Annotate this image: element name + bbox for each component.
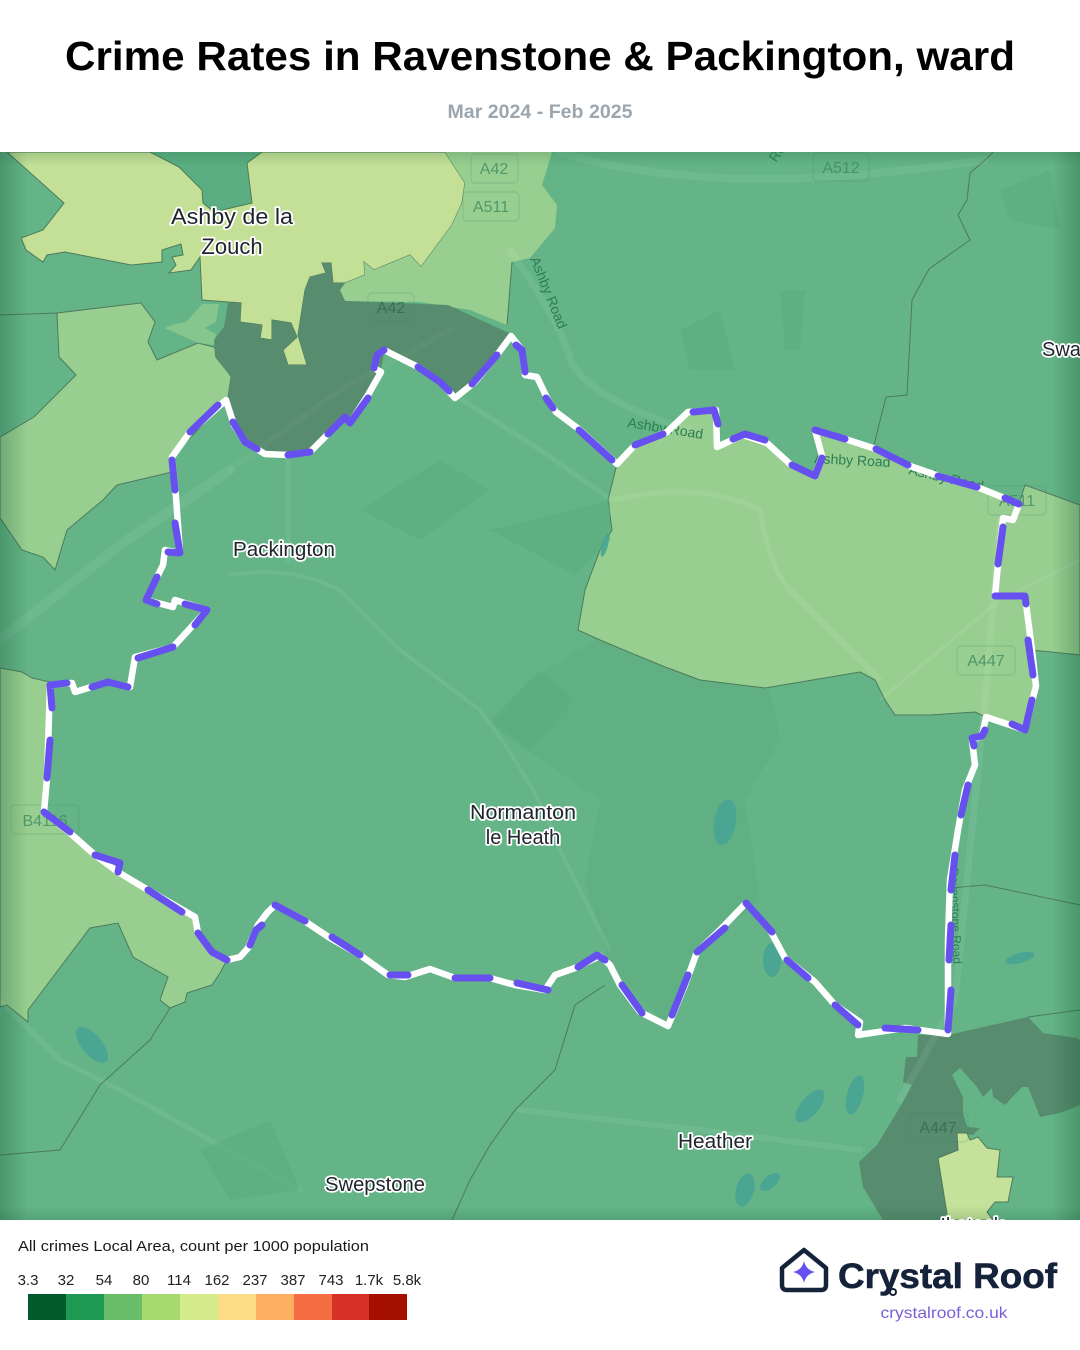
- legend tick labels: 80: [133, 1272, 149, 1289]
- legend tick labels: 3.3: [18, 1272, 38, 1289]
- road shield: A447 south: [920, 1112, 968, 1142]
- region: small light strip: [165, 304, 219, 345]
- legend tick labels: 237: [242, 1272, 268, 1289]
- road label: partial Re: Re: [765, 141, 789, 165]
- road shield: B4116: B4116: [22, 813, 68, 830]
- road shield: A42 Ashby: A42: [377, 300, 405, 317]
- road shield: A447 east: [957, 646, 1015, 675]
- place label: Normanton le Heath: Normanton: [470, 802, 576, 824]
- icon: house with star: [782, 1250, 826, 1290]
- legend tick labels: 114: [167, 1272, 191, 1289]
- road shield: A447 south: A447: [919, 1120, 957, 1137]
- legend tick labels: 54: [96, 1272, 112, 1289]
- road shield: A511 east: [988, 486, 1046, 515]
- region: east light green: [578, 410, 1080, 730]
- boundary white line: [44, 336, 1036, 1035]
- road label: Ashby Road centre: Ashby Road: [627, 414, 704, 442]
- region: west light green: [0, 303, 231, 570]
- place label: Packington: Packington: [233, 539, 335, 561]
- boundary purple dashes: [44, 345, 1033, 1030]
- legend tick labels: 1.7k: [355, 1272, 384, 1289]
- region boundary lines: [0, 152, 1080, 1220]
- place label: Heather: Heather: [678, 1131, 752, 1153]
- legend colour scale: [28, 1294, 407, 1320]
- map vignette: [0, 152, 1080, 1220]
- road shield: A42 Ashby: [368, 292, 414, 313]
- road shield: A42 north: A42: [480, 161, 508, 178]
- legend tick labels: [18, 1272, 422, 1289]
- water bodies: [70, 533, 1036, 1209]
- field patches: [214, 500, 610, 1190]
- place label: Normanton le Heath: le Heath: [486, 827, 560, 849]
- region: southwest light green: [0, 668, 227, 1022]
- road shield: A447 east: A447: [967, 653, 1005, 670]
- legend tick labels: 5.8k: [393, 1272, 422, 1289]
- place label: Ashby de la Zouch: Zouch: [201, 234, 263, 259]
- road label: Ashby Road east: Ashby Road: [814, 450, 891, 470]
- legend tick labels: 387: [280, 1272, 306, 1289]
- region: Ibstock high band: [938, 1133, 1013, 1220]
- date subtitle: Mar 2024 - Feb 2025: [448, 102, 633, 123]
- road shield: A512: [812, 160, 870, 182]
- road label: Ashby Road north-south: Ashby Road: [527, 254, 571, 331]
- region: Ibstock dark band: [859, 1017, 1080, 1220]
- logo: Crystal Roof: [782, 1250, 1057, 1322]
- legend tick labels: 32: [58, 1272, 74, 1289]
- region: low crime dark patch south of Ashby: [214, 263, 509, 455]
- legend: [18, 1238, 422, 1320]
- logo wordmark: Crystal Roof: [838, 1257, 1057, 1296]
- road shield: B4116: [11, 805, 79, 834]
- road shield: A511 north: [463, 192, 519, 221]
- road shield: A42 north: [471, 154, 518, 183]
- road shield: A511 north: A511: [473, 199, 509, 216]
- place label: Swepstone: Swepstone: [325, 1174, 425, 1196]
- logo keyring detail: [890, 1289, 896, 1295]
- road label: Ashby Road far east: Ashby Road: [907, 461, 985, 494]
- map base: low crime green: [0, 152, 1080, 1220]
- place label: Ibstock partial: Ibstock: [940, 1215, 1005, 1237]
- roads: [0, 152, 1080, 1190]
- road shield: A512: A512: [822, 160, 860, 177]
- region: Ashby north patch: [164, 158, 252, 210]
- road label: Ravenstone Road south: Ravenstone Road: [947, 868, 964, 964]
- legend title: All crimes Local Area, count per 1000 population: [18, 1238, 369, 1255]
- region: northeast of Ashby light green: [340, 152, 557, 325]
- place label: Ashby de la Zouch: [171, 204, 294, 259]
- title: Crime Rates in Ravenstone & Packington, ward: [65, 33, 1015, 79]
- darker central field area: [490, 630, 780, 1026]
- road shield: A511 east: A511: [999, 493, 1035, 510]
- place label: Ashby de la Zouch: Ashby de la: [171, 204, 294, 229]
- place label: Normanton le Heath: [470, 802, 576, 849]
- legend tick labels: 743: [318, 1272, 344, 1289]
- region: Ashby de la Zouch high band: [7, 152, 465, 365]
- ward boundary: [44, 336, 1036, 1035]
- logo url: crystalroof.co.uk: [880, 1305, 1009, 1322]
- legend tick labels: 162: [204, 1272, 230, 1289]
